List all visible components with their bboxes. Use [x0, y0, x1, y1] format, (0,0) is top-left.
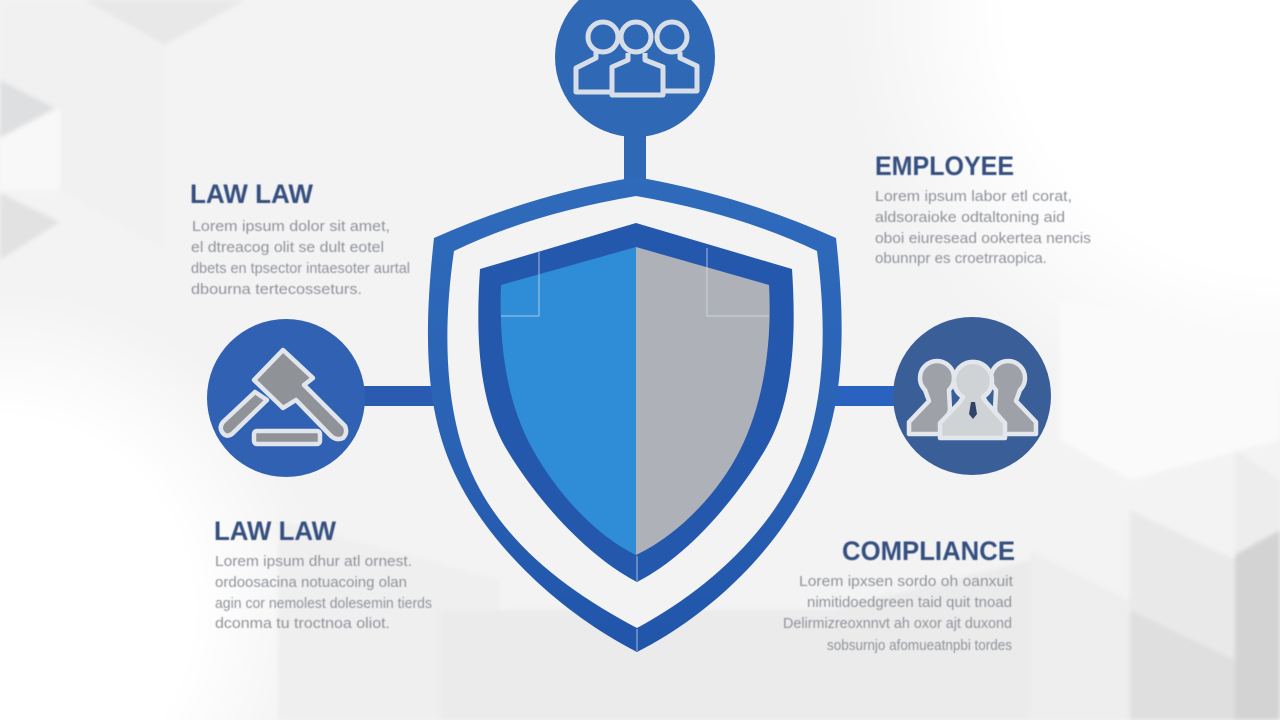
body lines: compliance	[783, 573, 1014, 654]
text block: compliance	[783, 536, 1015, 654]
body lines: law law lower: ordoosacina notuacoing olan	[215, 574, 407, 591]
body lines: compliance: Delirmizreoxnnvt ah oxor ajt duxond	[783, 615, 1012, 632]
body lines: employee: aldsoraioke odtaltoning aid	[875, 209, 1065, 226]
connector: top stem	[624, 130, 646, 185]
connector: right bar	[832, 386, 898, 406]
body lines: law law lower	[215, 553, 432, 632]
body lines: compliance: nimitidoedgreen taid quit tnoad	[807, 594, 1012, 611]
body lines: law law: el dtreacog olit se dult eotel	[191, 239, 384, 256]
background: far right grey	[1235, 530, 1280, 720]
heading: law law lower: LAW LAW	[214, 516, 336, 546]
background: grey block	[1130, 610, 1235, 720]
body lines: law law	[191, 218, 410, 298]
background: left triangle one	[0, 80, 55, 138]
body lines: employee: oboi eiuresead ookertea nencis	[875, 230, 1091, 247]
text block: employee	[875, 151, 1091, 267]
body lines: law law: Lorem ipsum dolor sit amet,	[192, 218, 390, 235]
connector: left bar	[360, 386, 436, 406]
body lines: compliance: sobsurnjo afomueatnpbi tordes	[827, 637, 1012, 654]
icon: employees circle	[893, 317, 1051, 475]
body lines: law law: dbourna tertecosseturs.	[191, 281, 362, 298]
shield: outer ring	[428, 177, 842, 652]
text block: law law bottom left	[214, 516, 432, 632]
background: lower shield block	[440, 560, 1030, 720]
heading: compliance: COMPLIANCE	[842, 536, 1015, 566]
body lines: law law lower: dconma tu troctnoa oliot.	[215, 615, 390, 632]
shield: inner ring	[478, 223, 794, 582]
heading: law law: LAW LAW	[190, 179, 313, 209]
icon: gavel circle	[207, 319, 365, 477]
shield: corner accents	[501, 248, 769, 651]
body lines: law law lower: Lorem ipsum dhur atl ornest.	[215, 553, 412, 570]
body lines: law law: dbets en tpsector intaesoter aurtal	[191, 260, 410, 277]
body lines: law law lower: agin cor nemolest dolesemin tierds	[215, 595, 432, 612]
background: far right light	[1235, 450, 1280, 555]
heading: employee: EMPLOYEE	[875, 151, 1014, 181]
body lines: compliance: Lorem ipxsen sordo oh oanxuit	[799, 573, 1014, 590]
shield: blue left half	[501, 247, 636, 555]
background: top wash left	[0, 0, 165, 250]
background: top triangle	[85, 0, 245, 45]
icon: top team circle	[555, 0, 715, 137]
icon detail: tie	[969, 402, 977, 419]
text block: law law top left	[190, 179, 410, 298]
body lines: employee	[875, 188, 1091, 267]
body lines: employee: obunnpr es croetrraopica.	[875, 250, 1047, 267]
shield: grey right half	[636, 247, 770, 555]
background: left panel	[0, 108, 60, 190]
background: left triangle two	[0, 193, 60, 260]
background: lower right block	[1030, 550, 1130, 720]
background: white glow left	[0, 290, 320, 720]
background: white glow top right	[840, 0, 1280, 440]
background: light area right	[1060, 300, 1280, 480]
body lines: employee: Lorem ipsum labor etl corat,	[875, 188, 1072, 205]
shield: interior fill	[447, 196, 823, 628]
background: lower centre block	[278, 520, 500, 720]
